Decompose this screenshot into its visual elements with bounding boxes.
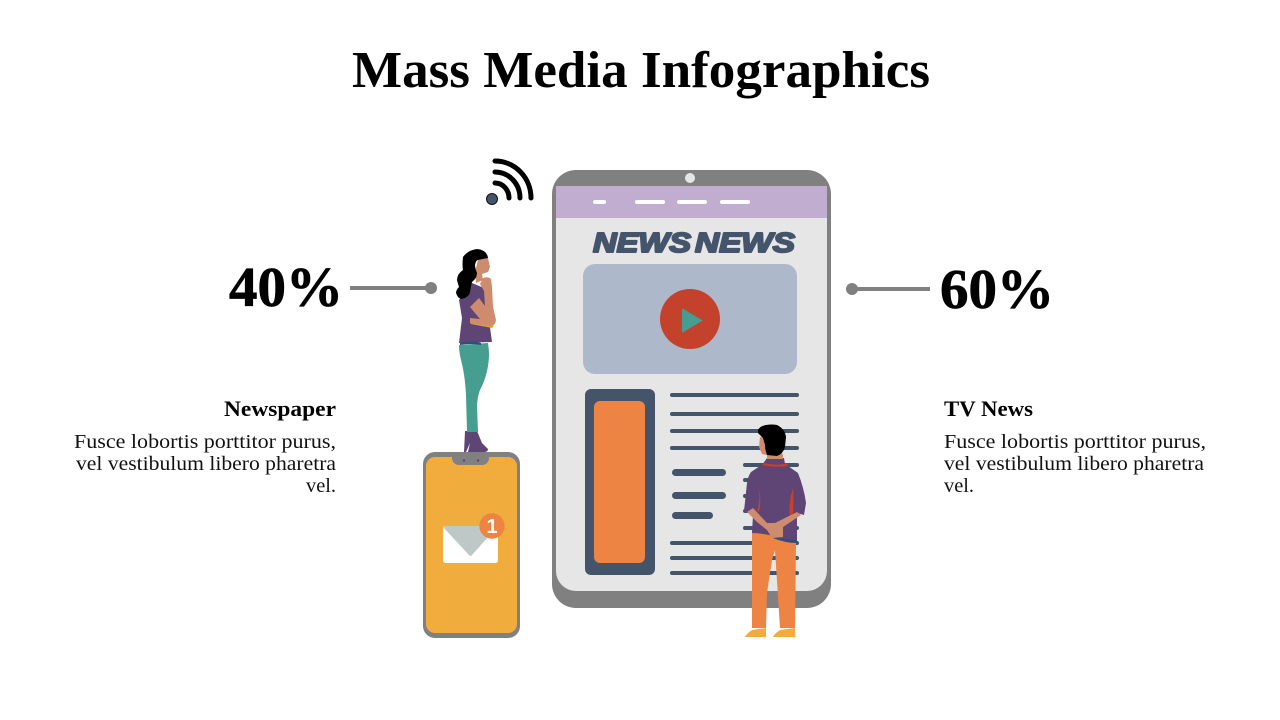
shirt folds xyxy=(757,486,794,518)
arms xyxy=(470,322,494,328)
arms and hands xyxy=(747,508,801,538)
connector: left xyxy=(350,282,437,294)
panel: tablet news page xyxy=(552,170,831,608)
heading: Newspaper: Newspaper xyxy=(224,396,336,421)
trousers xyxy=(459,343,489,432)
text block: newspaper description: Fusce lobortis porttitor purus, xyxy=(74,431,336,453)
trousers xyxy=(752,530,797,628)
waistband xyxy=(773,536,797,543)
percentage: 60%: 60% xyxy=(940,259,1054,321)
text block: newspaper description xyxy=(74,431,336,497)
boots xyxy=(464,431,488,452)
icon: smartphone with mail notification xyxy=(423,452,520,638)
hair xyxy=(456,249,488,299)
news logo xyxy=(593,227,795,258)
title: Mass Media Infographics xyxy=(352,42,930,99)
news logo: NEWS xyxy=(695,227,795,258)
news logo: NEWS xyxy=(593,227,691,258)
neck and face xyxy=(759,437,783,459)
text block: TV news description xyxy=(944,431,1206,497)
text block: TV news description: Fusce lobortis porttitor purus, xyxy=(944,431,1206,453)
shirt xyxy=(459,283,492,343)
text block: newspaper description: vel. xyxy=(306,475,336,497)
collar xyxy=(762,458,788,467)
connector: right xyxy=(846,283,930,295)
panel: newspaper statistic xyxy=(74,257,437,497)
face and neck xyxy=(475,258,490,283)
article text lines xyxy=(670,393,799,575)
tablet header bar xyxy=(556,186,827,218)
percentage: 40%: 40% xyxy=(229,257,343,319)
video player xyxy=(583,264,797,374)
hair xyxy=(758,424,786,456)
notification badge xyxy=(479,513,505,539)
shirt xyxy=(744,464,806,540)
panel: TV news statistic xyxy=(846,259,1206,497)
text block: TV news description: vel vestibulum libero pharetra xyxy=(944,453,1204,475)
illustration: woman thinking xyxy=(456,249,496,452)
icon: wifi signal xyxy=(486,161,531,204)
text block: TV news description: vel. xyxy=(944,475,974,497)
illustration: man from behind xyxy=(744,424,806,637)
heading: TV News: TV News xyxy=(944,396,1033,421)
sidebar image xyxy=(585,389,655,575)
notification badge: 1 xyxy=(486,516,498,538)
shoes xyxy=(745,628,795,637)
envelope xyxy=(443,526,498,563)
text block: newspaper description: vel vestibulum libero pharetra xyxy=(76,453,336,475)
